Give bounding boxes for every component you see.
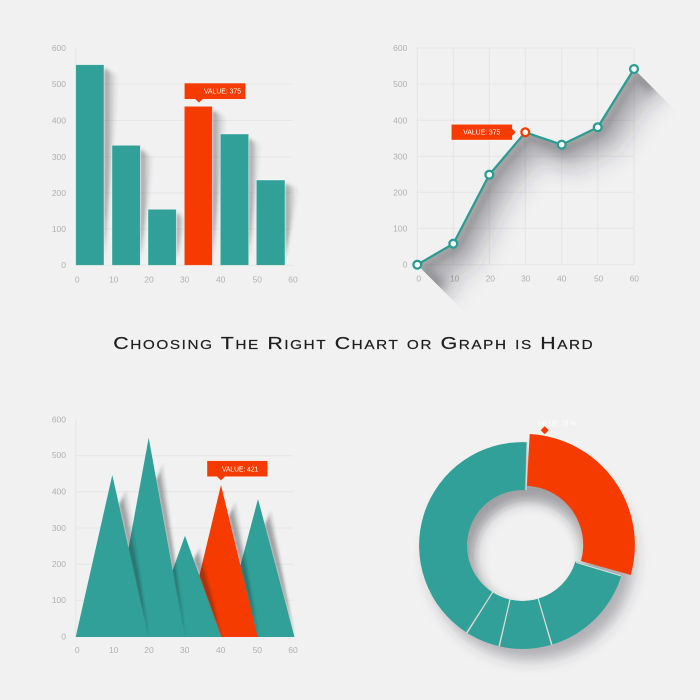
bar chart y axis labels: 100 [52, 224, 66, 234]
line chart x axis labels: 50 [594, 274, 604, 284]
shadow of third triangle [194, 547, 222, 637]
triangle chart y axis labels: 200 [52, 559, 66, 569]
bar chart x axis labels: 60 [288, 274, 298, 284]
red triangle [185, 485, 258, 637]
panel: line chart [393, 43, 663, 298]
first triangle [76, 475, 148, 637]
triangle chart x axis labels: 50 [253, 645, 262, 655]
donut marker diamond [541, 426, 549, 434]
title: Choosing The Right Chart or Graph is Hard [113, 334, 593, 353]
triangle chart y axis labels: 100 [52, 595, 66, 605]
line chart y axis labels: 0 [403, 260, 408, 270]
bar shadows [104, 68, 298, 258]
triangle chart x axis labels: 0 [75, 645, 80, 655]
bar chart y axis labels: 400 [52, 116, 66, 126]
donut slice separators [467, 442, 621, 646]
shadow of rightmost triangle [265, 510, 294, 637]
triangle chart y axis labels: 600 [52, 414, 66, 424]
donut drop shadow [451, 477, 611, 637]
data line [417, 69, 634, 265]
donut teal slice right [539, 561, 621, 644]
shadow of first triangle [119, 488, 148, 637]
line chart tooltip: VALUE: 375 [463, 128, 500, 137]
donut teal large slice [419, 442, 527, 632]
bar chart y axis labels: 600 [52, 43, 66, 53]
bar chart x axis labels [75, 274, 298, 284]
triangle chart y axis labels: 500 [52, 450, 66, 460]
line chart x axis labels: 30 [521, 274, 531, 284]
triangle chart x axis labels: 30 [180, 645, 190, 655]
data point markers [413, 65, 638, 269]
donut value label: VALUE: 28 % [537, 418, 576, 427]
line chart long shadow [420, 72, 663, 298]
bar chart y axis labels: 200 [52, 188, 66, 198]
line chart y axis labels: 200 [393, 187, 408, 197]
second triangle [112, 438, 185, 637]
line chart y axis labels: 600 [393, 43, 408, 53]
line chart y axis labels: 300 [393, 151, 408, 161]
line chart x axis labels: 10 [450, 274, 460, 284]
triangle chart tooltip: VALUE: 421 [222, 465, 258, 474]
bar chart y axis labels [52, 43, 66, 270]
bar chart x axis labels: 40 [216, 274, 226, 284]
line chart x axis labels: 40 [557, 274, 567, 284]
donut teal slice small [468, 592, 510, 646]
panel: bar chart [52, 43, 298, 284]
triangle chart x axis labels [75, 645, 298, 655]
line chart y axis labels [393, 43, 408, 270]
bar chart x axis labels: 30 [180, 274, 190, 284]
triangle chart x axis labels: 10 [109, 645, 119, 655]
triangle chart x axis labels: 20 [144, 645, 154, 655]
line chart tooltip [451, 124, 516, 140]
line chart y axis labels: 400 [393, 115, 408, 125]
bar chart x axis labels: 0 [75, 274, 80, 284]
bar chart y axis labels: 0 [61, 260, 66, 270]
triangle chart y axis labels: 300 [52, 523, 66, 533]
panel: triangle chart [52, 414, 298, 655]
panel: donut chart [419, 418, 635, 649]
line chart x axis labels [416, 274, 639, 284]
donut hole inner shadow [465, 492, 589, 616]
triangle chart y axis labels: 400 [52, 487, 66, 497]
line chart y axis labels: 100 [393, 223, 408, 233]
triangle chart x axis labels: 60 [288, 645, 298, 655]
triangle chart y axis labels: 0 [61, 631, 66, 641]
bar chart x axis labels: 10 [109, 274, 119, 284]
shadow of second triangle [156, 463, 185, 637]
bar chart y axis labels: 500 [52, 79, 66, 89]
third triangle [149, 536, 222, 637]
triangle chart tooltip [207, 461, 268, 481]
bar chart x axis labels: 50 [253, 274, 262, 284]
bar chart x axis labels: 20 [144, 274, 154, 284]
line chart x axis labels: 20 [486, 274, 495, 284]
donut red slice [527, 434, 635, 575]
bar chart tooltip [184, 83, 246, 103]
line chart x axis labels: 0 [416, 274, 421, 284]
bar chart y axis labels: 300 [52, 152, 66, 162]
donut teal slice middle [500, 599, 551, 649]
bars [76, 65, 285, 265]
line chart y axis labels: 500 [393, 79, 408, 89]
rightmost teal triangle [222, 499, 294, 637]
shadow of red triangle [229, 500, 258, 637]
infographic canvas [52, 45, 668, 668]
bar chart tooltip: VALUE: 375 [204, 87, 241, 96]
triangle chart x axis labels: 40 [216, 645, 226, 655]
line chart x axis labels: 60 [630, 274, 639, 284]
triangle chart y axis labels [52, 414, 66, 641]
